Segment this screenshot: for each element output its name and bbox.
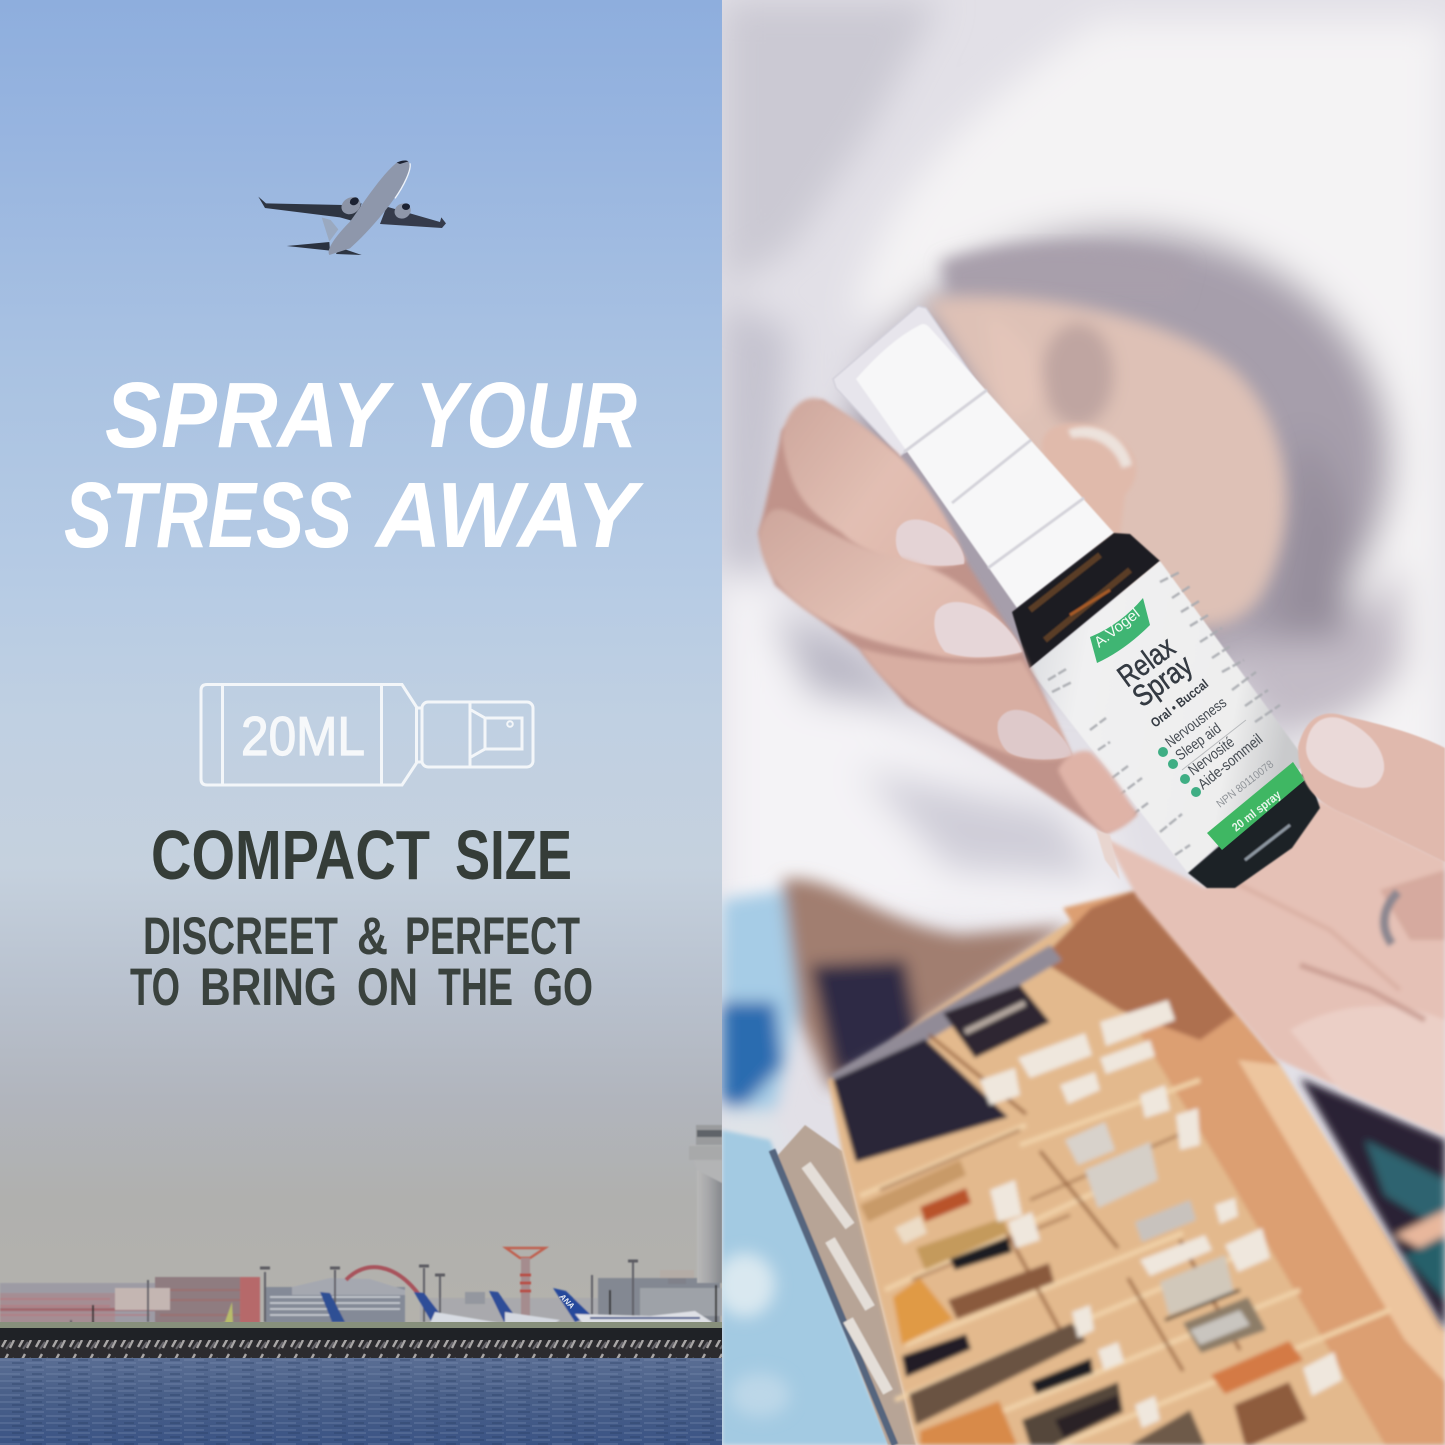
subheading: compact size bbox=[153, 830, 570, 880]
body text: TO bbox=[130, 958, 180, 1017]
sea wall bbox=[0, 1328, 722, 1340]
label product name: Oral • Buccal bbox=[1148, 676, 1211, 730]
label green band: 20 ml spray bbox=[1229, 787, 1284, 834]
magazine spine and page edge bbox=[772, 1125, 916, 1445]
heading: STRESS bbox=[64, 463, 352, 567]
ring nail bbox=[997, 710, 1072, 759]
hood opening bbox=[848, 228, 1392, 692]
panel: airport sky photo bbox=[0, 0, 722, 1445]
face behind hand bbox=[925, 296, 1286, 626]
ring finger bbox=[860, 648, 1072, 760]
label benefits list: Sleep aid bbox=[1172, 720, 1224, 764]
red tower bbox=[506, 1248, 545, 1258]
spray bottle bbox=[833, 306, 1320, 888]
translucent cap bbox=[833, 306, 983, 456]
ANA tail lettering: ANA bbox=[557, 1291, 576, 1311]
glass base bbox=[1188, 770, 1320, 888]
body text: & bbox=[357, 907, 388, 966]
control tower bbox=[689, 1125, 722, 1283]
thumb bbox=[1298, 714, 1445, 862]
subheading: compact size: COMPACT bbox=[151, 816, 430, 894]
skyline buildings bbox=[0, 1246, 722, 1322]
label small print bbox=[1048, 572, 1280, 855]
panel: hand holding spray bottle photo bbox=[715, 0, 1445, 1445]
magazine blue cover bbox=[722, 879, 1070, 1150]
magazine photo of buildings bbox=[828, 890, 1445, 1445]
hood top shadow bbox=[934, 238, 1106, 294]
label benefits list: Aide-sommeil bbox=[1195, 731, 1266, 793]
subheading: compact size: SIZE bbox=[455, 816, 572, 894]
body text: DISCREET bbox=[143, 907, 338, 966]
palm and lower hand bbox=[1105, 800, 1445, 1136]
icon: 20ml bottle outline bbox=[201, 684, 533, 785]
ring bbox=[1384, 892, 1398, 944]
airplane in flight bbox=[258, 160, 446, 255]
index finger bbox=[782, 398, 966, 568]
lower nail sliver bbox=[1096, 830, 1120, 880]
label logo: A.Vogel bbox=[1091, 605, 1143, 651]
spray nozzle stem bbox=[856, 324, 1114, 608]
breakwater rocks bbox=[0, 1340, 722, 1358]
body text: THE bbox=[438, 958, 513, 1017]
magazine bbox=[715, 879, 1445, 1445]
label logo bbox=[1090, 598, 1150, 663]
fingers holding bottle bbox=[759, 398, 1445, 880]
clouds bbox=[715, 1253, 790, 1417]
red arch bbox=[346, 1267, 420, 1296]
bottle label bbox=[1029, 561, 1307, 873]
middle nail bbox=[934, 602, 1022, 657]
label benefits list bbox=[1158, 694, 1266, 797]
heading: AWAY bbox=[374, 463, 645, 567]
little finger bbox=[1058, 751, 1137, 834]
amber glass neck bbox=[1012, 533, 1160, 669]
light poles bbox=[70, 1262, 635, 1322]
body text: BRING bbox=[200, 958, 337, 1017]
body text: GO bbox=[533, 958, 593, 1017]
grass strip bbox=[0, 1322, 722, 1328]
label benefits list: Nervosité bbox=[1185, 734, 1238, 779]
magazine far background bbox=[1300, 1078, 1445, 1330]
sky background bbox=[0, 0, 722, 1445]
heading: SPRAY bbox=[105, 363, 395, 467]
body text: ON bbox=[357, 958, 418, 1017]
magazine page sky bbox=[722, 1130, 890, 1445]
label product name: Relax bbox=[1112, 631, 1181, 694]
label benefits list: Nervousness bbox=[1162, 694, 1230, 751]
index nail bbox=[896, 519, 964, 566]
robe base bbox=[722, 0, 1445, 1445]
hand shadow base bbox=[759, 400, 1137, 834]
white hood bbox=[722, 0, 1445, 940]
parked planes bbox=[320, 1292, 345, 1322]
thumb nail bbox=[1306, 717, 1384, 788]
icon: 20ml bottle outline: 20ML bbox=[241, 705, 365, 767]
label NPN: NPN 80110078 bbox=[1214, 758, 1276, 810]
heading: YOUR bbox=[415, 363, 637, 467]
label product name: Spray bbox=[1127, 649, 1199, 714]
body text bbox=[130, 917, 592, 1006]
finger in front of face with nail bbox=[1042, 423, 1136, 535]
middle finger bbox=[759, 509, 1022, 659]
water bbox=[0, 1358, 722, 1445]
body text: PERFECT bbox=[405, 907, 580, 966]
heading bbox=[64, 382, 644, 548]
label product name bbox=[1112, 631, 1211, 730]
label green band bbox=[1207, 762, 1305, 850]
